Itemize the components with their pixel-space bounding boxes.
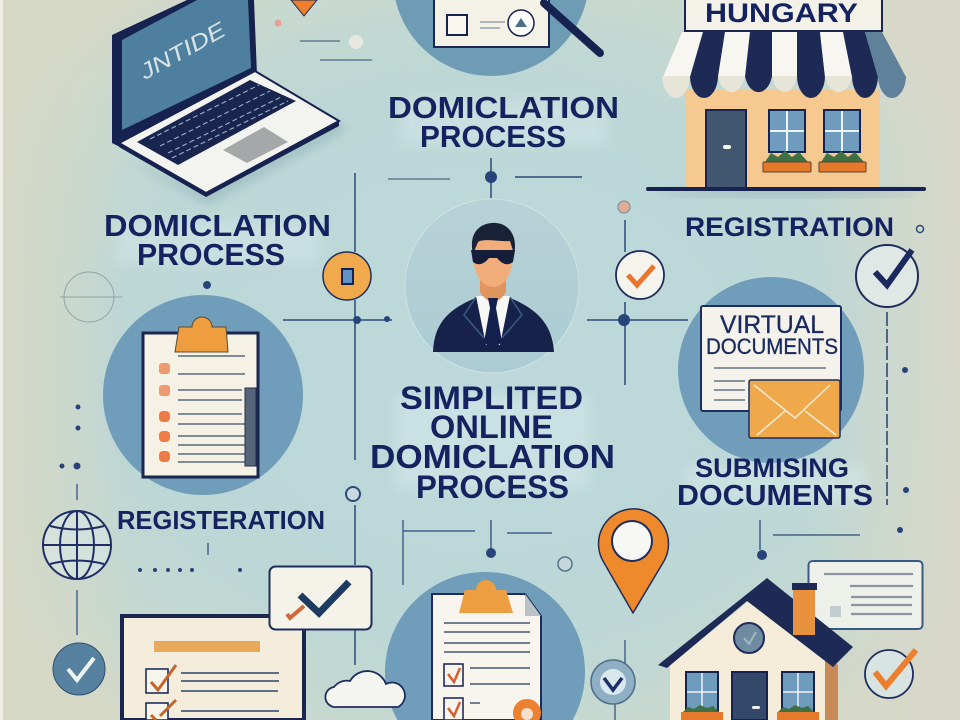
shop icon — [646, 0, 926, 197]
laptop screen label: JNTIDE — [134, 17, 230, 85]
left circle with clipboard — [103, 295, 303, 495]
icon: location pin — [598, 509, 668, 613]
heading: domiciliation process (top) — [388, 90, 619, 154]
top circle with document and magnifier — [396, 0, 600, 76]
heading: simplified online domiciliation process: SIMPLITED — [400, 380, 583, 416]
heading: simplified online domiciliation process: PROCESS — [416, 469, 569, 505]
heading: registeration: REGISTERATION — [117, 505, 325, 535]
icon: orange check circle — [865, 650, 916, 698]
icon: target crosshair — [60, 272, 122, 322]
heading: domiciliation process (top): DOMICLATION — [388, 90, 619, 125]
info card bottom right — [808, 561, 922, 629]
person — [433, 223, 554, 352]
house icon — [658, 578, 853, 720]
heading: simplified online domiciliation process: ONLINE — [430, 409, 553, 445]
form panel bottom left — [122, 616, 304, 720]
right circle with virtual documents: DOCUMENTS — [706, 334, 838, 359]
heading: submitting documents — [677, 453, 873, 512]
orange pin top — [291, 0, 317, 16]
shop sign — [685, 0, 882, 31]
heading: domiciliation process (left) — [104, 208, 331, 272]
small chevron badge — [591, 660, 635, 704]
right circle with virtual documents: VIRTUAL — [720, 311, 824, 339]
icon: cloud — [325, 671, 405, 707]
heading: registration: REGISTRATION — [685, 212, 894, 242]
envelope — [749, 380, 840, 438]
checklist rows — [159, 356, 245, 462]
bottom circle with clipboard — [385, 572, 585, 720]
laptop icon — [112, 0, 345, 204]
icon: orange door badge — [323, 252, 371, 300]
icon: blue check badge — [53, 643, 105, 695]
heading: submitting documents: DOCUMENTS — [677, 480, 873, 512]
icon: clock check — [856, 245, 918, 307]
heading: domiciliation process (left): PROCESS — [137, 237, 285, 272]
heading: domiciliation process (left): DOMICLATION — [104, 208, 331, 243]
orange lock icon — [513, 699, 541, 720]
clipboard clip — [175, 317, 228, 352]
center circle with person — [405, 199, 579, 373]
heading: submitting documents: SUBMISING — [695, 453, 849, 483]
heading: simplified online domiciliation process: DOMICLATION — [370, 438, 615, 475]
clipboard clip — [459, 580, 513, 613]
right circle with virtual documents — [678, 277, 864, 463]
heading: domiciliation process (top): PROCESS — [420, 119, 566, 154]
awning — [662, 32, 906, 98]
icon: globe — [43, 511, 111, 579]
heading: simplified online domiciliation process — [370, 380, 615, 505]
check bubble — [270, 566, 372, 630]
icon: orange check badge — [616, 251, 664, 299]
